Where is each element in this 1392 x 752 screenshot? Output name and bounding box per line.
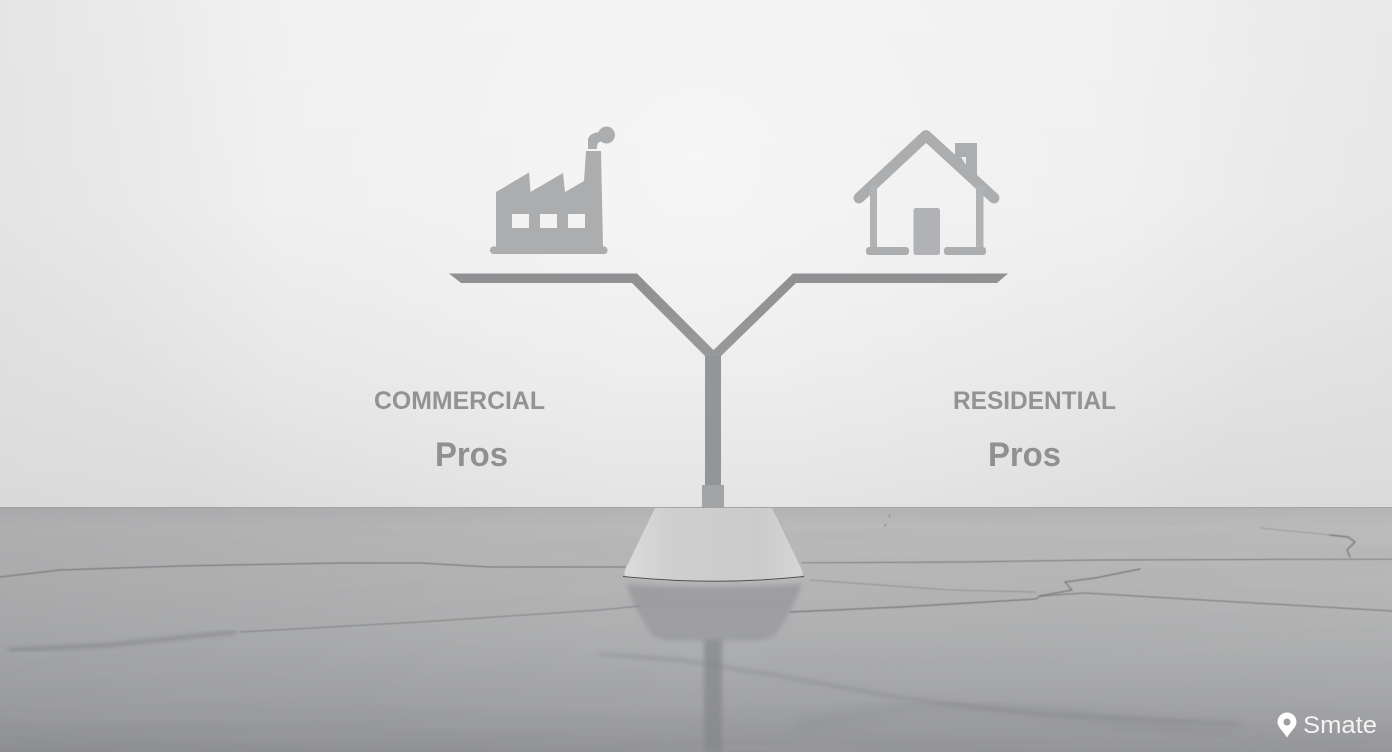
label: residential pros: Pros <box>988 436 1061 474</box>
logo: Smate <box>1278 712 1377 739</box>
label: commercial pros: Pros <box>435 436 508 474</box>
label: commercial: COMMERCIAL <box>374 387 545 415</box>
floor cracks <box>0 515 1392 735</box>
icon: factory <box>490 126 615 254</box>
scale beam <box>449 274 1008 356</box>
icon: house <box>859 136 994 255</box>
label: residential: RESIDENTIAL <box>953 387 1116 415</box>
scale base <box>623 508 804 582</box>
reflection of the scale on the floor <box>626 584 802 752</box>
concrete floor <box>0 507 1392 752</box>
background wall <box>0 0 1392 508</box>
scale column <box>702 352 724 508</box>
logo: Smate: Smate <box>1303 712 1377 739</box>
